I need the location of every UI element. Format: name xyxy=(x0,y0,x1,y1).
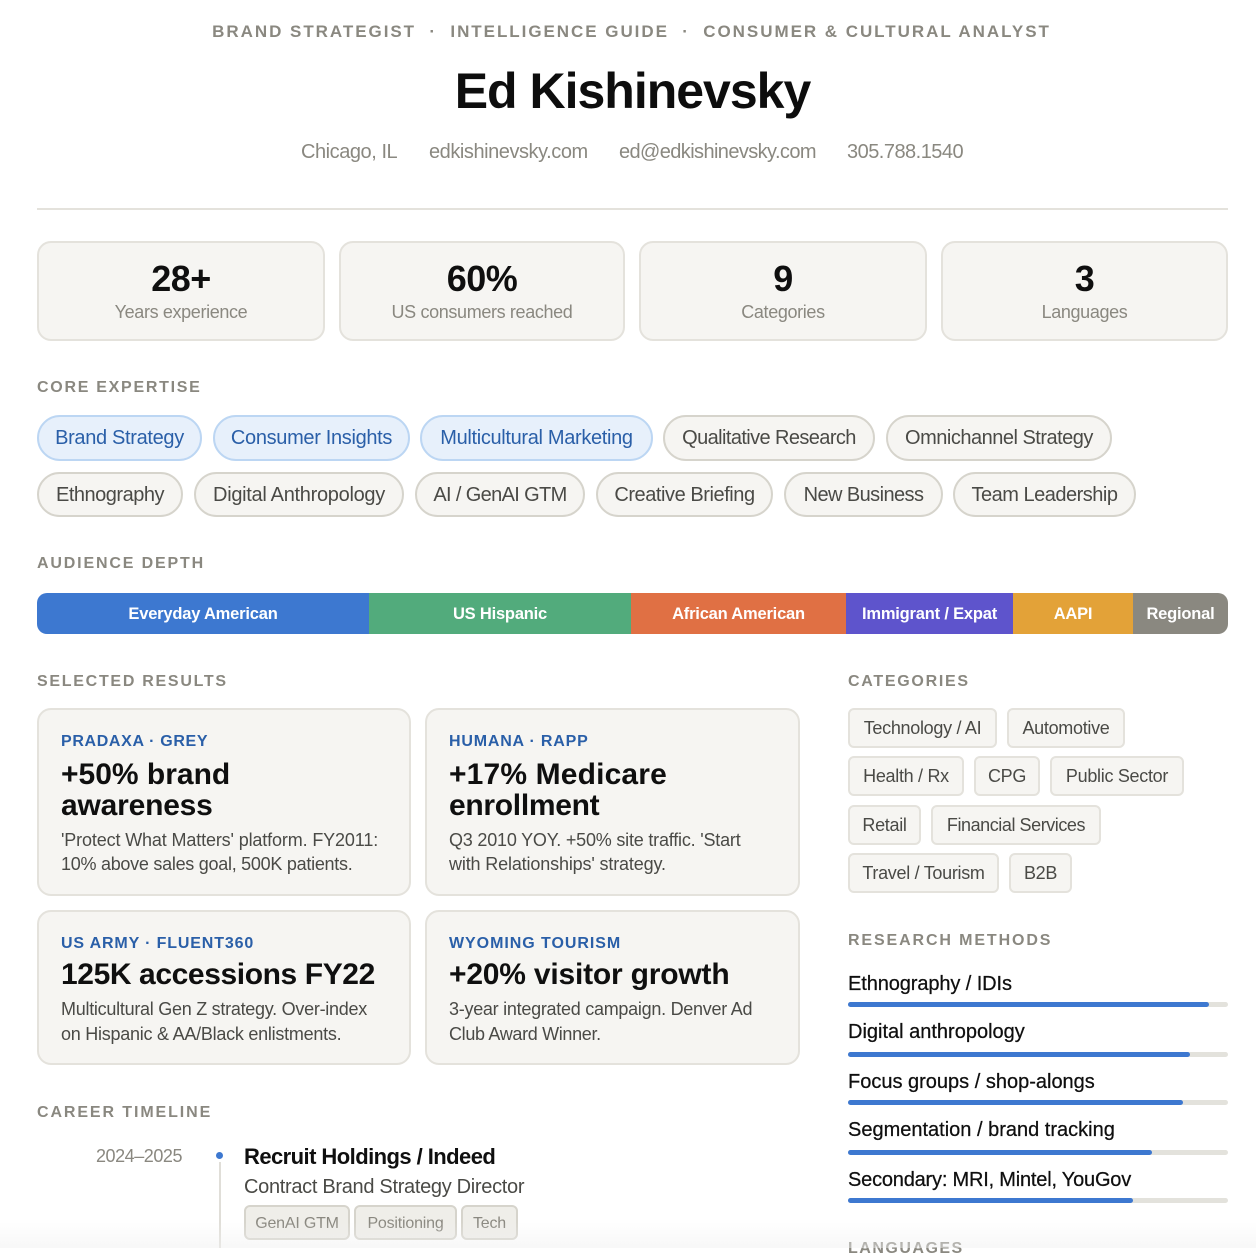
pill xyxy=(953,472,1136,517)
heading: categories: CATEGORIES xyxy=(848,673,970,690)
chip xyxy=(931,805,1101,845)
chip xyxy=(1009,853,1072,893)
chip: Retail xyxy=(862,815,907,835)
pill xyxy=(37,472,183,517)
pill xyxy=(420,415,653,461)
segment: AAPI xyxy=(1054,605,1092,623)
segment xyxy=(631,593,846,634)
chip xyxy=(848,756,964,796)
method: Ethnography / IDIs xyxy=(848,973,1012,995)
stat: languages: 3 xyxy=(1075,258,1094,299)
pill: Creative Briefing xyxy=(614,484,755,506)
tag xyxy=(461,1205,518,1240)
title: Ed Kishinevsky xyxy=(455,63,810,119)
segment: Immigrant / Expat xyxy=(862,605,997,623)
pill xyxy=(194,472,404,517)
contact line: ed@edkishinevsky.com xyxy=(619,141,816,163)
bar xyxy=(848,1198,1228,1203)
result card: Wyoming: Club Award Winner. xyxy=(449,1024,601,1044)
tag xyxy=(244,1205,350,1240)
heading: research methods: RESEARCH METHODS xyxy=(848,932,1052,949)
segment: Everyday American xyxy=(128,605,278,623)
result card: Humana: enrollment xyxy=(449,789,599,822)
result card: Pradaxa: awareness xyxy=(61,789,213,822)
bar xyxy=(848,1150,1228,1155)
result card: US Army: on Hispanic & AA/Black enlistments. xyxy=(61,1024,341,1044)
tags xyxy=(244,1205,518,1240)
pill xyxy=(415,472,585,517)
chip: Public Sector xyxy=(1066,766,1168,786)
segment xyxy=(369,593,631,634)
stat: years: 28+ xyxy=(151,258,211,299)
result card: US Army xyxy=(37,910,411,1065)
stat: categories xyxy=(639,241,927,341)
stat: categories: 9 xyxy=(773,258,793,299)
pill: Team Leadership xyxy=(972,484,1117,506)
result card: Wyoming xyxy=(425,910,800,1065)
method: Segmentation / brand tracking xyxy=(848,1119,1115,1141)
method: Digital anthropology xyxy=(848,1021,1025,1043)
stat: languages xyxy=(941,241,1228,341)
segment xyxy=(1133,593,1228,634)
tag: Tech xyxy=(473,1215,506,1232)
timeline line xyxy=(219,1162,221,1248)
contact line: 305.788.1540 xyxy=(847,141,963,163)
tag: GenAI GTM xyxy=(255,1215,339,1232)
segment xyxy=(846,593,1013,634)
result card: Wyoming: 3-year integrated campaign. Denver Ad xyxy=(449,999,752,1019)
employer: Recruit Holdings / Indeed xyxy=(244,1144,495,1169)
result card: Pradaxa: 'Protect What Matters' platform. FY2011: xyxy=(61,830,378,850)
pill xyxy=(596,472,773,517)
contact line: Chicago, IL xyxy=(301,141,397,163)
segment xyxy=(37,593,369,634)
segment xyxy=(1013,593,1133,634)
pill xyxy=(886,415,1112,461)
stat: consumers: 60% xyxy=(447,258,517,299)
stat cards xyxy=(37,241,1228,341)
pill: Ethnography xyxy=(56,484,164,506)
result card: US Army: 125K accessions FY22 xyxy=(61,958,375,991)
contact line: edkishinevsky.com xyxy=(429,141,588,163)
chip: B2B xyxy=(1024,863,1057,883)
segment: US Hispanic xyxy=(453,605,547,623)
heading: languages: LANGUAGES xyxy=(848,1240,964,1257)
result card: Humana: with Relationships' strategy. xyxy=(449,854,666,874)
audience stacked bar xyxy=(37,593,1228,634)
chip xyxy=(1007,708,1125,748)
chip: Technology / AI xyxy=(864,718,981,738)
segment: African American xyxy=(672,605,805,623)
pill xyxy=(37,415,202,461)
date: 2024–2025 xyxy=(96,1146,182,1166)
pill xyxy=(213,415,410,461)
result card: Humana: +17% Medicare xyxy=(449,758,667,791)
chip: Automotive xyxy=(1022,718,1110,738)
result card: Pradaxa: PRADAXA · GREY xyxy=(61,733,208,750)
result card: Pradaxa xyxy=(37,708,411,896)
method: Focus groups / shop-alongs xyxy=(848,1071,1095,1093)
method: Secondary: MRI, Mintel, YouGov xyxy=(848,1169,1131,1191)
stat: languages: Languages xyxy=(1042,302,1127,322)
chip xyxy=(848,853,999,893)
research methods bars xyxy=(848,973,1228,1203)
stat: consumers xyxy=(339,241,625,341)
timeline entry xyxy=(96,1144,524,1248)
pill xyxy=(663,415,875,461)
contact line xyxy=(301,141,963,163)
stat: categories: Categories xyxy=(741,302,825,322)
chip xyxy=(848,805,921,845)
pill: Consumer Insights xyxy=(231,427,392,449)
result card: Pradaxa: +50% brand xyxy=(61,758,230,791)
header divider xyxy=(37,208,1228,210)
pill: Qualitative Research xyxy=(682,427,856,449)
result card: Humana: Q3 2010 YOY. +50% site traffic. 'Start xyxy=(449,830,741,850)
pill xyxy=(784,472,943,517)
pill: Omnichannel Strategy xyxy=(905,427,1093,449)
result card: Pradaxa: 10% above sales goal, 500K patients. xyxy=(61,854,352,874)
chip xyxy=(974,756,1040,796)
stat: years xyxy=(37,241,325,341)
bar xyxy=(848,1100,1228,1105)
stat: years: Years experience xyxy=(115,302,247,322)
chip: Travel / Tourism xyxy=(862,863,985,883)
chip: Health / Rx xyxy=(863,766,949,786)
pill: Multicultural Marketing xyxy=(440,427,633,449)
chip: CPG xyxy=(988,766,1026,786)
result card: Wyoming: +20% visitor growth xyxy=(449,958,729,991)
category chips xyxy=(848,708,1184,893)
expertise pills xyxy=(37,415,1136,517)
tag: Positioning xyxy=(367,1215,444,1232)
chip: Financial Services xyxy=(947,815,1085,835)
heading: career timeline: CAREER TIMELINE xyxy=(37,1104,212,1121)
pill: Brand Strategy xyxy=(55,427,184,449)
chip xyxy=(848,708,997,748)
pill: AI / GenAI GTM xyxy=(433,484,567,506)
tag xyxy=(354,1205,457,1240)
result card: Humana xyxy=(425,708,800,896)
pill: New Business xyxy=(804,484,923,506)
result card: US Army: US ARMY · FLUENT360 xyxy=(61,935,254,952)
role line: BRAND STRATEGIST · INTELLIGENCE GUIDE · CONSUMER & CULTURAL ANALYST xyxy=(212,22,1051,41)
result card: US Army: Multicultural Gen Z strategy. Over-index xyxy=(61,999,367,1019)
bottom fade xyxy=(0,1222,1256,1248)
bar xyxy=(848,1052,1228,1057)
pill: Digital Anthropology xyxy=(213,484,385,506)
heading: selected results: SELECTED RESULTS xyxy=(37,673,228,690)
segment: Regional xyxy=(1146,605,1215,623)
bar xyxy=(848,1002,1228,1007)
heading: core expertise: CORE EXPERTISE xyxy=(37,379,202,396)
result card: Humana: HUMANA · RAPP xyxy=(449,733,589,750)
heading: audience depth: AUDIENCE DEPTH xyxy=(37,555,205,572)
result card: Wyoming: WYOMING TOURISM xyxy=(449,935,621,952)
stat: consumers: US consumers reached xyxy=(392,302,572,322)
timeline dot xyxy=(216,1152,223,1159)
chip xyxy=(1050,756,1184,796)
role: Contract Brand Strategy Director xyxy=(244,1176,524,1198)
